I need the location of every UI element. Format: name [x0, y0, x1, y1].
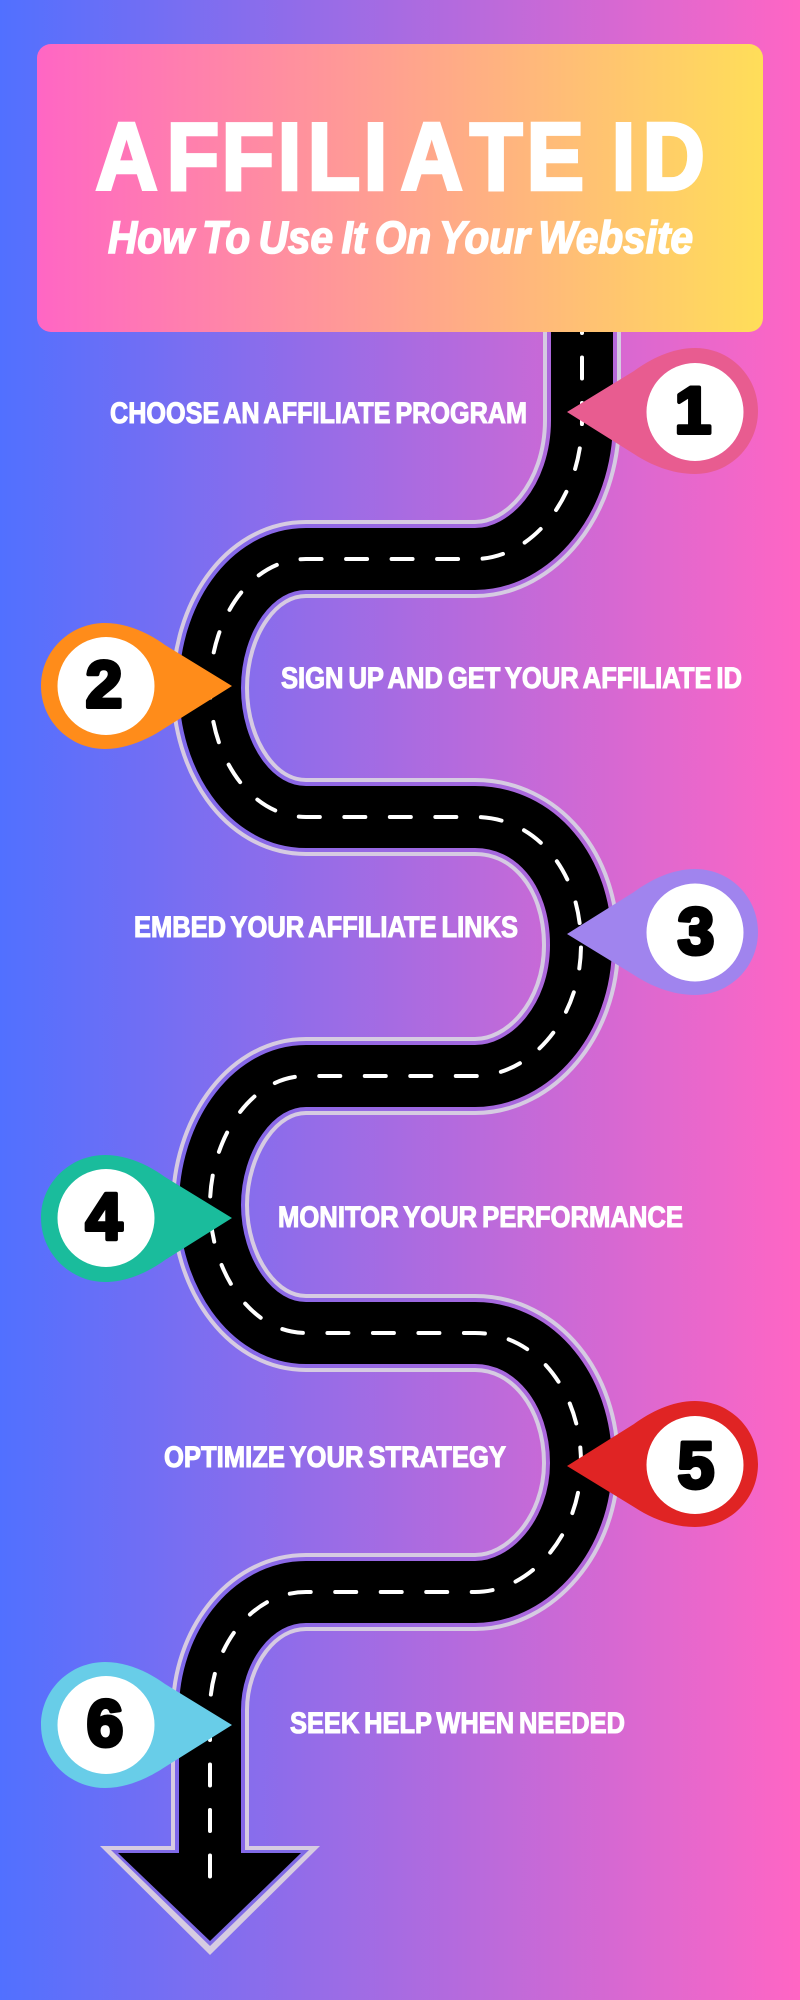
title: AFFILIATE ID [95, 103, 705, 211]
pin 2: 2 [86, 647, 122, 721]
subtitle: How To Use It On Your Website [108, 212, 693, 263]
pin 6: 6 [87, 1686, 123, 1760]
step 4 [41, 1155, 683, 1282]
winding road with arrow [100, 300, 582, 1955]
step 1 [110, 348, 758, 474]
step 5 [164, 1401, 758, 1527]
pin 5 [567, 1401, 758, 1527]
pin 1: 1 [675, 373, 711, 447]
header banner [37, 44, 763, 332]
label: step 4: MONITOR YOUR PERFORMANCE [278, 1201, 683, 1234]
pin 4 [41, 1155, 232, 1282]
label: step 3: EMBED YOUR AFFILIATE LINKS [134, 911, 518, 944]
pin 2 [41, 623, 232, 749]
step 2 [41, 623, 742, 749]
label: step 6: SEEK HELP WHEN NEEDED [290, 1707, 625, 1740]
pin 6 [41, 1662, 232, 1788]
pin 3: 3 [678, 894, 714, 968]
pin 1 [567, 348, 758, 474]
label: step 1: CHOOSE AN AFFILIATE PROGRAM [110, 397, 527, 430]
label: step 5: OPTIMIZE YOUR STRATEGY [164, 1441, 506, 1474]
step 3 [134, 869, 758, 995]
pin 5: 5 [678, 1428, 714, 1502]
step 6 [41, 1662, 625, 1788]
label: step 2: SIGN UP AND GET YOUR AFFILIATE ID [281, 662, 742, 695]
pin 4: 4 [86, 1179, 123, 1253]
pin 3 [567, 869, 758, 995]
